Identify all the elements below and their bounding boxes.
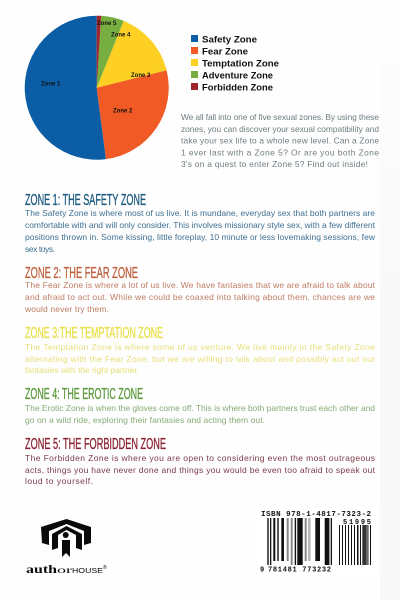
pie chart: Zone 5 [97,21,117,27]
legend [191,34,279,92]
addon price: 51995 [343,519,371,527]
pie chart: Zone 2 [113,108,133,114]
zone 4 section: The Erotic Zone is when the gloves come off. This is where both partners trust each other and [25,403,375,413]
zone 2 section [24,265,376,314]
zone 4 heading: ZONE 4: THE EROTIC ZONE [25,386,143,403]
zone 3 section: fantasies with the right partner. [25,365,139,375]
zone 1 heading: ZONE 1: THE SAFETY ZONE [25,192,146,209]
intro paragraph: 1 ever last with a Zone 5? Or are you both Zone [181,148,379,158]
zone 2 heading: ZONE 2: THE FEAR ZONE [25,265,138,282]
publisher name: ® [103,564,107,571]
legend: Temptation Zone [202,58,279,68]
legend: Fear Zone [202,46,248,56]
legend: Adventure Zone [202,70,273,80]
pie chart: Zone 3 [131,73,151,79]
intro paragraph: take your sex life to a whole new level. Can a Zone [181,136,379,146]
zone 5 section: acts, things you have never done and things you would be even too afraid to speak out [25,465,376,475]
intro paragraph: 3's on a quest to enter Zone 5? Find out inside! [181,159,368,169]
main digits: 9 [260,566,264,574]
publisher name: or [57,566,74,576]
main bars [267,518,332,565]
barcode: 781481 773232 [268,566,331,574]
zone 5 section: loud to yourself. [25,476,93,486]
pie chart: Zone 4 [111,32,131,38]
zone 4 section [25,386,375,425]
zone 1 section [25,192,376,254]
zone 4 section: go on a wild ride, exploring their fantasies and acting them out. [25,415,265,425]
zone 2 section: The Fear Zone is where a lot of us live. We have fantasies that we are afraid to talk about [25,280,376,290]
zone 1 section: sex toys. [25,244,55,254]
publisher name: auth [26,564,58,576]
intro paragraph: We all fall into one of five sexual zones. By using these [181,112,379,122]
zone 3 section [25,325,375,375]
zone 5 heading: ZONE 5: THE FORBIDDEN ZONE [25,436,166,453]
intro paragraph: zones, you can discover your sexual compatibility and [181,124,379,134]
isbn text: ISBN 978-1-4817-7323-2 [261,511,371,519]
publisher name [26,564,107,576]
intro paragraph [181,112,379,169]
zone 2 section: would never try them. [24,304,109,314]
legend: Forbidden Zone [202,82,273,92]
barcode [258,505,378,576]
zone 1 section: The Safety Zone is where most of us live. It is mundane, everyday sex that both partners are [25,208,375,218]
zone 5 section [25,436,376,486]
zone 5 section: The Forbidden Zone is where you are open to considering even the most outrageous [25,453,375,463]
zone 3 section: alternating with the Fear Zone, but we are willing to talk about and possibly act out our [25,354,375,364]
zone 2 section: and afraid to act out. While we could be coaxed into talking about them, chances are we [25,292,375,302]
icon: authorhouse logo [26,519,107,576]
zone 1 section: comfortable with and will only consider. This involves missionary style sex, with a few different [25,220,376,230]
pie chart [25,16,169,160]
publisher name: HOUSE [72,566,103,575]
pie chart: Zone 1 [41,82,61,88]
zone 3 section: The Temptation Zone is where some of us venture. We live mainly in the Safety Zone [25,342,375,352]
zone 1 section: positions thrown in. Some kissing, little foreplay, 10 minute or less lovemaking sessions, few [25,232,376,242]
legend: Safety Zone [202,34,257,44]
zone 3 heading: ZONE 3:THE TEMPTATION ZONE [25,325,163,342]
addon bars [339,525,371,565]
